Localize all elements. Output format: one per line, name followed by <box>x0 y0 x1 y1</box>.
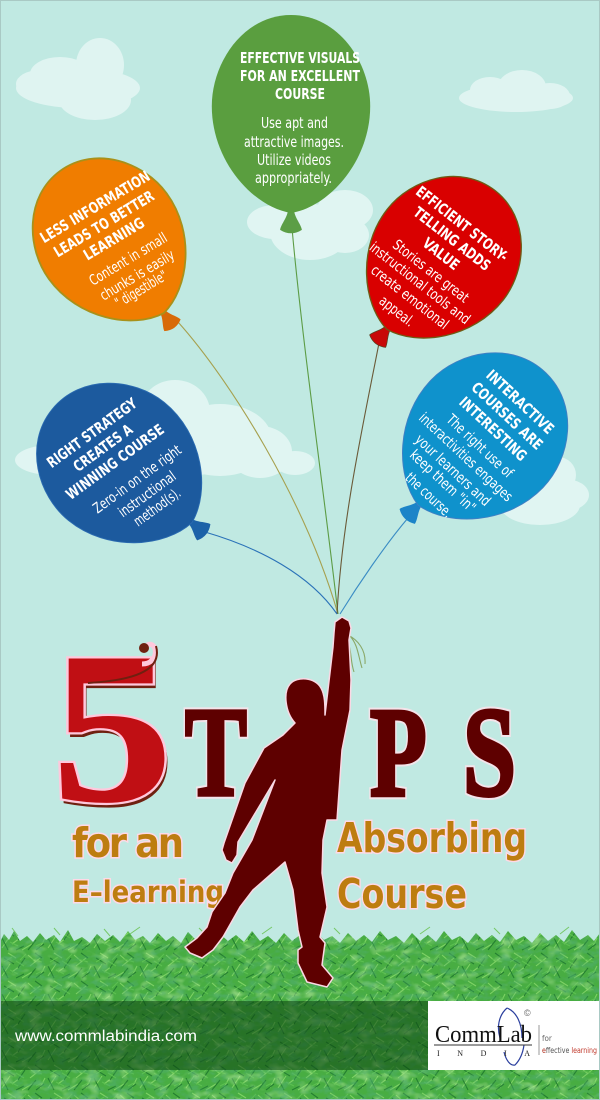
numeral 5 swash <box>88 643 157 683</box>
green heading: EFFECTIVE VISUALS <box>240 49 360 67</box>
blue heading: RIGHT STRATEGY <box>43 394 141 472</box>
balloon: dark blue, right strategy: CREATES A <box>70 420 137 476</box>
green body <box>244 114 344 187</box>
balloon: cyan, interactive courses: INTERESTING <box>455 393 531 465</box>
green body: appropriately. <box>255 169 332 187</box>
balloon: orange, less information: " digestible" <box>113 268 170 312</box>
green body: Use apt and <box>261 114 328 132</box>
green body: Utilize videos <box>257 151 331 169</box>
orange body: Content in small <box>87 230 170 289</box>
letter P: P <box>370 683 427 824</box>
balloon: cyan, interactive courses: your learners and <box>411 432 493 510</box>
string: dark blue <box>205 532 337 614</box>
letter S: S <box>463 683 516 823</box>
balloon: green, effective visuals <box>212 15 370 233</box>
subtitle: Absorbing Course: Absorbing <box>337 814 527 862</box>
balloon: dark blue, right strategy <box>4 350 254 593</box>
balloon: cyan, interactive courses: COURSES ARE <box>468 378 546 454</box>
green heading: FOR AN EXCELLENT <box>240 67 361 85</box>
letter T: T <box>185 683 247 824</box>
green body: attractive images. <box>244 133 344 151</box>
footer bar <box>0 1001 428 1070</box>
numeral 5: 5 <box>54 614 175 851</box>
letter T: T <box>185 683 247 824</box>
balloon: red, efficient story-telling: TELLING ADDS <box>410 203 494 275</box>
orange heading: LESS INFORMATION <box>37 167 153 247</box>
balloon: dark blue, right strategy: WINNING COURSE <box>62 420 168 504</box>
cyan body: The right use of <box>442 411 516 482</box>
balloon: orange, less information: LEADS TO BETTER <box>51 187 158 261</box>
loose string ends <box>347 635 365 672</box>
string: orange <box>178 322 338 614</box>
subtitle: for an E-learning: E–learning <box>72 875 224 909</box>
logo copyright: © <box>524 1008 531 1018</box>
balloon: orange, less information: LEARNING <box>80 214 148 264</box>
balloon: orange, less information: chunks is easily <box>97 247 178 304</box>
subtitle: for an E-learning <box>72 819 224 909</box>
logo tagline: effective learning <box>542 1046 597 1055</box>
logo tagline <box>542 1034 597 1055</box>
balloon: red, efficient story-telling: VALUE <box>419 234 463 274</box>
subtitle: Absorbing Course <box>337 814 527 918</box>
grass field <box>0 925 600 1100</box>
balloon: red, efficient story-telling: appeal. <box>376 293 417 330</box>
green heading: COURSE <box>275 85 325 103</box>
cloud: top right <box>459 70 573 112</box>
green heading <box>240 49 361 103</box>
string: red <box>337 338 380 614</box>
logo wordmark: CommLab <box>435 1022 532 1048</box>
balloon: dark blue, right strategy: instructional <box>116 469 179 521</box>
balloon: cyan, interactive courses: the course. <box>402 470 455 521</box>
string: cyan <box>340 518 408 614</box>
cloud: bottom right <box>500 457 589 525</box>
red heading: EFFICIENT STORY- <box>412 182 512 266</box>
website url: www.commlabindia.com <box>14 1028 197 1045</box>
logo: CommLab India <box>428 1001 600 1070</box>
logo india: INDIA <box>437 1049 530 1058</box>
subtitle: for an E-learning: for an <box>72 819 184 867</box>
balloon: dark blue, right strategy: method(s). <box>131 485 184 530</box>
balloon: red, efficient story-telling <box>318 145 553 389</box>
logo arc <box>498 1008 524 1065</box>
title: 5 TIPS <box>52 610 516 851</box>
string: green <box>292 228 338 614</box>
boy silhouette <box>185 617 351 987</box>
balloon: cyan, interactive courses: interactivities engages <box>415 410 516 505</box>
letter S: S <box>463 683 516 823</box>
red body: Stories are great <box>389 237 472 306</box>
logo tagline: for <box>542 1034 552 1043</box>
subtitle: Absorbing Course: Course <box>337 870 467 918</box>
balloon strings <box>178 228 408 672</box>
balloon: red, efficient story-telling: instructional tools and <box>366 240 473 328</box>
blue body: Zero-in on the right <box>90 442 185 517</box>
balloon: cyan, interactive courses <box>349 319 600 573</box>
balloon: red, efficient story-telling: create emotional <box>367 263 451 333</box>
cloud: top left <box>16 38 140 120</box>
cloud: behind green balloon <box>247 190 373 260</box>
numeral 5: 5 <box>52 610 172 847</box>
balloon: orange, less information <box>1 128 233 371</box>
letter P: P <box>370 683 427 824</box>
cyan heading: INTERACTIVE <box>482 366 558 438</box>
balloon: cyan, interactive courses: keep them "in" <box>406 447 478 516</box>
cloud: behind blue balloon <box>15 380 315 478</box>
numeral 5: 5 <box>52 610 172 847</box>
